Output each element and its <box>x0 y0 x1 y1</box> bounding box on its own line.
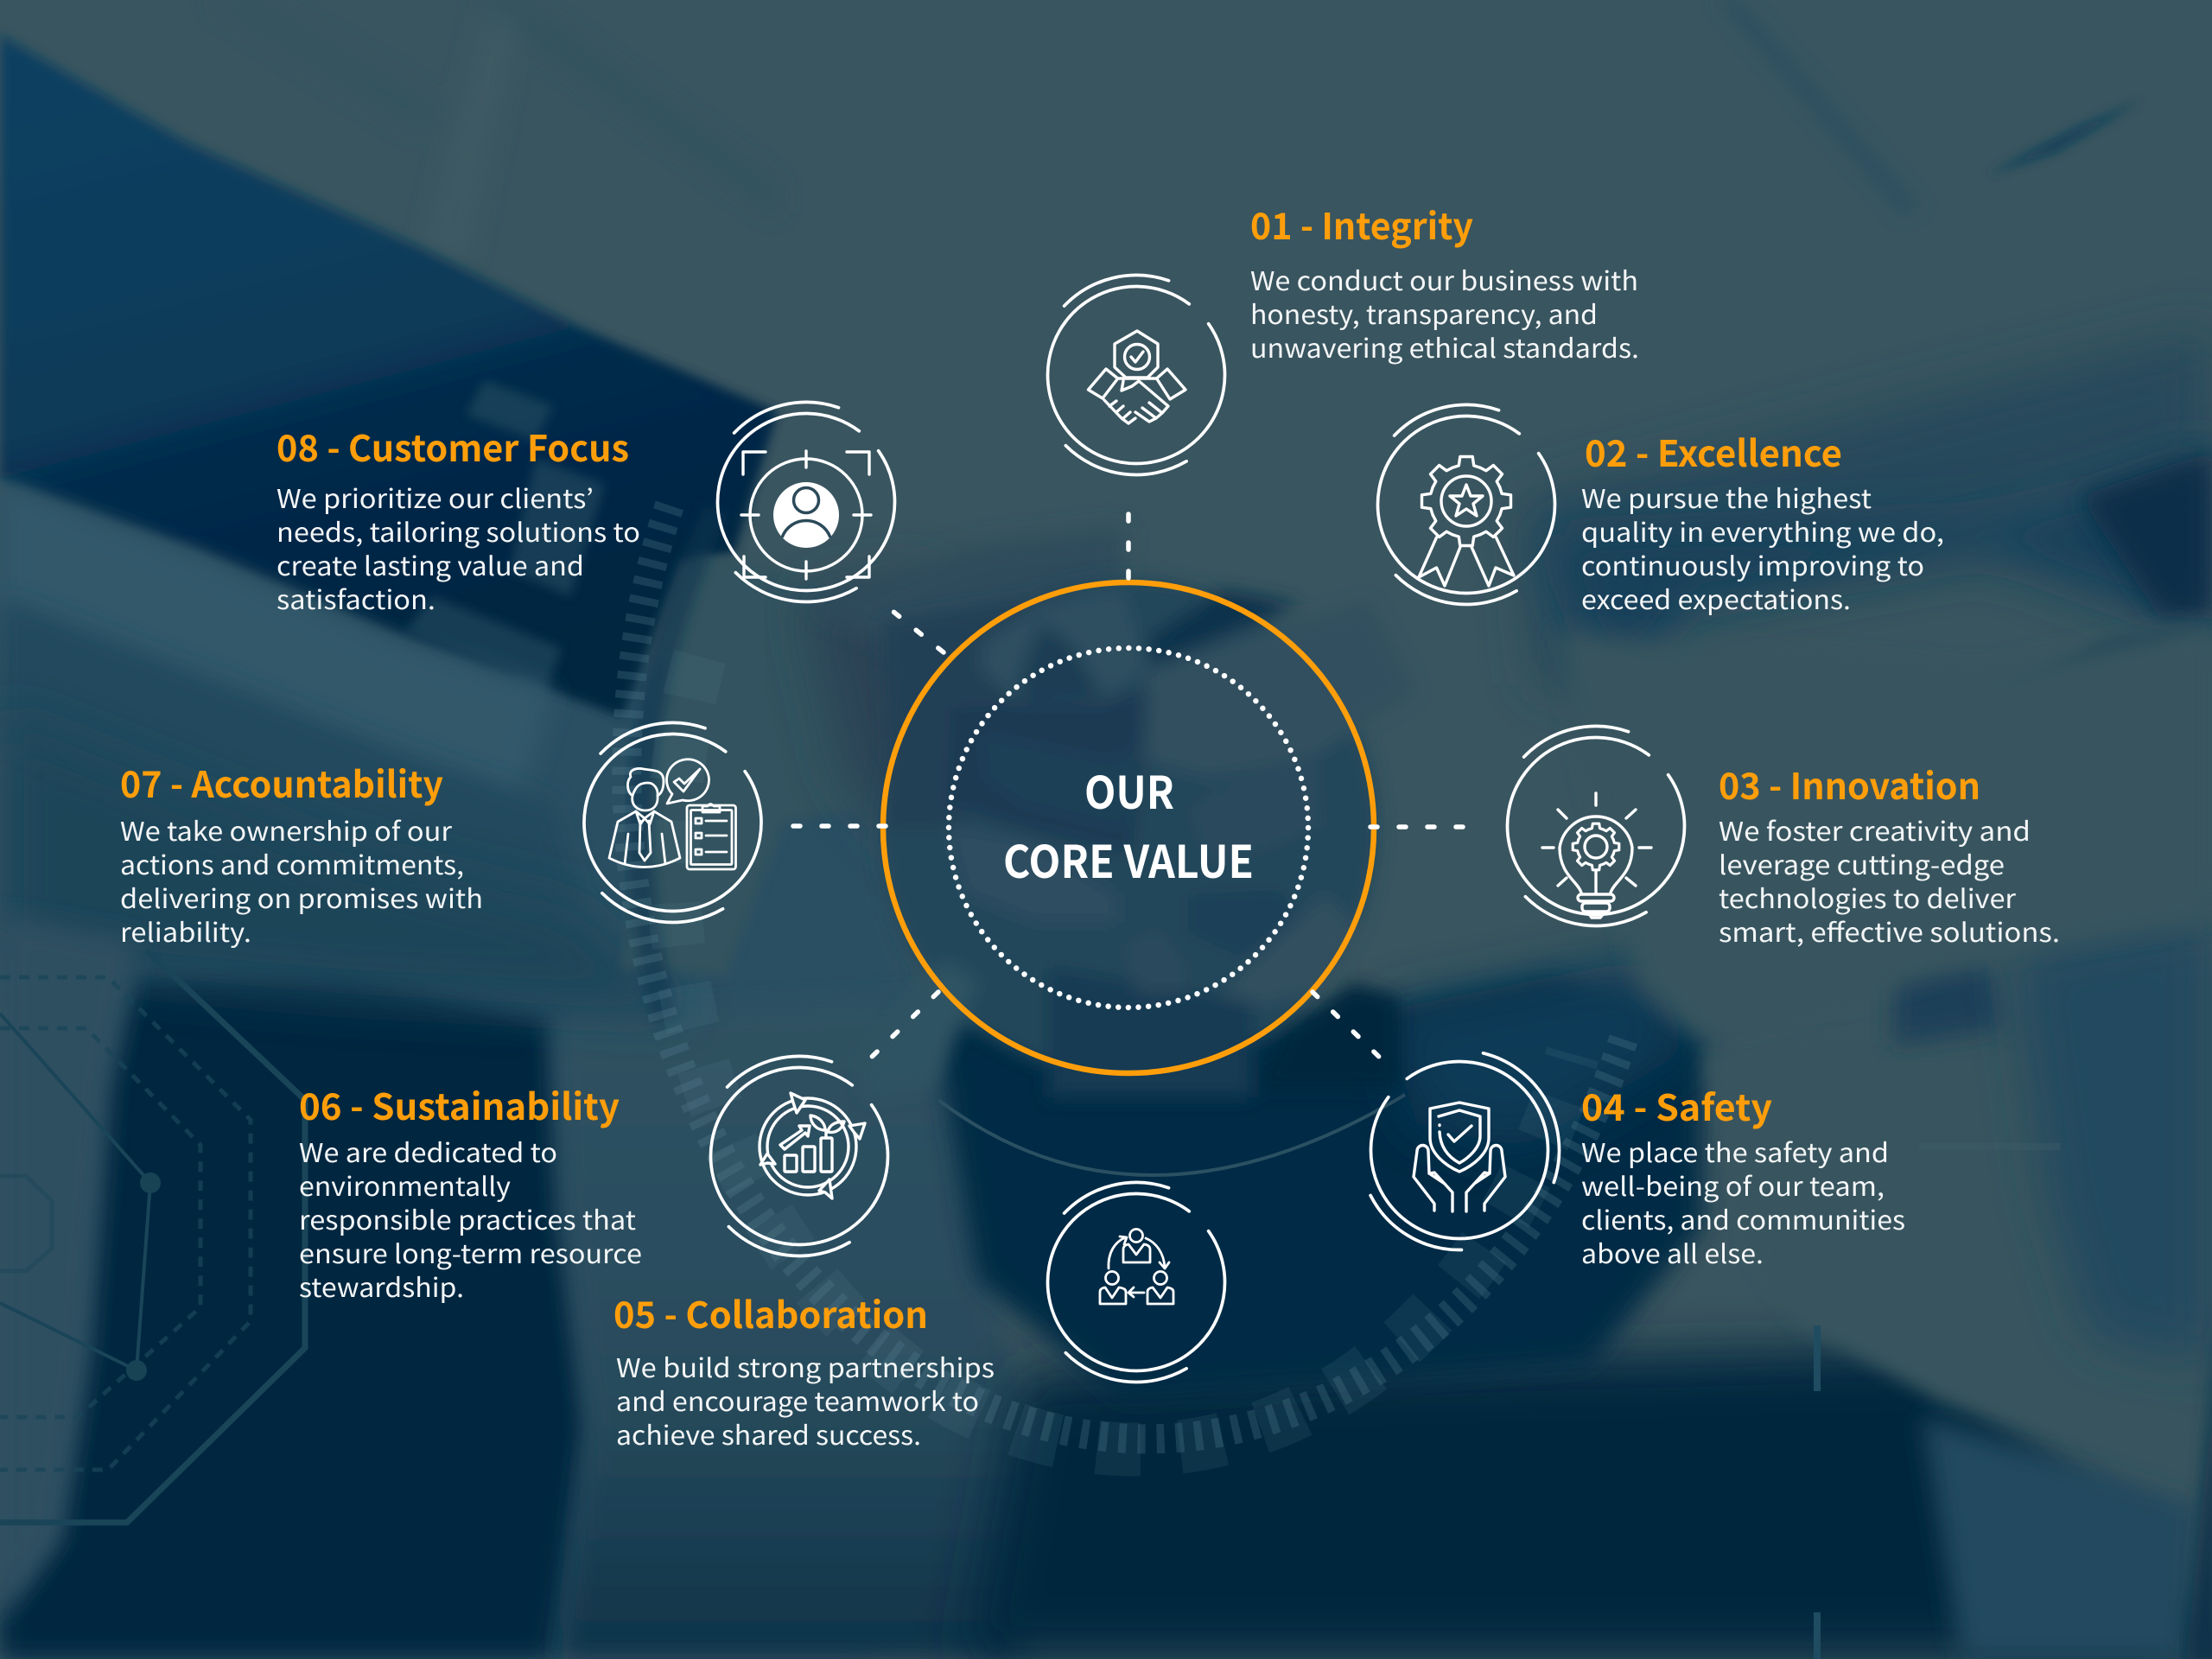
text: description: technologies to deliver <box>1719 878 2016 916</box>
upper hand behind center <box>812 527 1123 683</box>
panel: 02 Excellence <box>1325 364 1944 645</box>
heading: 01 Integrity: 01 - Integrity <box>1250 198 1473 251</box>
left sleeve <box>0 35 778 717</box>
sleeve plaid <box>406 380 605 717</box>
text: description: leverage cutting-edge <box>1719 844 2005 882</box>
text: description: We pursue the highest <box>1581 478 1872 516</box>
text: description: responsible practices that <box>299 1199 636 1237</box>
text: description: above all else. <box>1581 1233 1764 1271</box>
text: description: We place the safety and <box>1581 1132 1889 1170</box>
text: description: well-being of our team, <box>1581 1166 1885 1204</box>
text: description: clients, and communities <box>1581 1199 1905 1237</box>
text: description: We conduct our business with <box>1250 260 1638 298</box>
text: description: exceed expectations. <box>1581 579 1851 617</box>
right sleeve dark band <box>1521 328 2212 695</box>
text: description: smart, effective solutions. <box>1719 912 2060 950</box>
text: description <box>1581 1132 1905 1271</box>
icon: customer target <box>665 361 947 643</box>
bottom-center hand and gear band <box>933 976 1702 1400</box>
text: description: We foster creativity and <box>1719 810 2031 849</box>
icon: handshake with shield <box>995 234 1277 516</box>
panel: 06 Sustainability <box>299 1015 940 1305</box>
icon: shield in hands <box>1336 1027 1583 1274</box>
center shirt / collar <box>622 555 899 976</box>
icon: growth cycle <box>658 1015 940 1297</box>
text: description: delivering on promises with <box>120 878 483 916</box>
text: description: stewardship. <box>299 1267 464 1305</box>
text: description: actions and commitments, <box>120 844 464 882</box>
heading: 05 Collaboration: 05 - Collaboration <box>613 1287 928 1339</box>
dotted inner ring <box>949 648 1308 1007</box>
dark suit on lower left <box>0 976 588 1659</box>
dashed connectors <box>791 514 1467 1058</box>
text: description <box>299 1132 642 1305</box>
panel: 03 Innovation <box>1455 685 2060 967</box>
heading: 08 Customer Focus: 08 - Customer Focus <box>276 420 629 473</box>
cuff light lower shirt <box>0 484 553 804</box>
panel: 08 Customer Focus <box>276 361 947 643</box>
title: our core value: CORE VALUE <box>1003 826 1254 891</box>
text: description: We build strong partnerships <box>616 1347 995 1385</box>
text: description: needs, tailoring solutions to <box>276 512 640 550</box>
text: description: We take ownership of our <box>120 810 452 849</box>
fists inside central circle <box>864 577 1417 1097</box>
text: description <box>616 1347 995 1452</box>
panel: 07 Accountability <box>120 682 814 963</box>
bottom dark <box>968 1348 2212 1659</box>
dark band of the gear on the left <box>640 510 717 1020</box>
text: description: create lasting value and <box>276 545 584 583</box>
icon: light bulb with gear <box>1455 685 1737 967</box>
panel: 01 Integrity <box>995 198 1639 516</box>
text: description: satisfaction. <box>276 579 435 617</box>
text: description: We prioritize our clients’ <box>276 478 594 516</box>
faint top diagonals <box>207 0 778 259</box>
heading: 03 Innovation: 03 - Innovation <box>1719 758 1980 810</box>
lower teal strip <box>553 994 1037 1659</box>
text: description <box>1581 478 1944 617</box>
right cuff light <box>1706 1025 2203 1492</box>
text: description: ensure long-term resource <box>299 1233 642 1271</box>
heading: 04 Safety: 04 - Safety <box>1581 1079 1772 1132</box>
light teal left edge <box>0 916 138 1616</box>
orange outer ring <box>883 582 1374 1073</box>
icon: person with checklist <box>531 682 814 963</box>
heading: 02 Excellence: 02 - Excellence <box>1585 425 1842 478</box>
icon: team cycle <box>995 1141 1277 1423</box>
text: description <box>120 810 483 950</box>
text: description: We are dedicated to <box>299 1132 557 1170</box>
panel: 05 Collaboration <box>613 1141 1277 1452</box>
text: description <box>276 478 640 617</box>
text: description: achieve shared success. <box>616 1414 921 1452</box>
heading: 07 Accountability: 07 - Accountability <box>120 756 443 809</box>
text: description: honesty, transparency, and <box>1250 294 1598 332</box>
text: description: continuously improving to <box>1581 545 1924 583</box>
title: our core value: OUR <box>1084 757 1174 822</box>
text: description: reliability. <box>120 912 251 950</box>
text: description: quality in everything we do, <box>1581 512 1944 550</box>
title: our core value <box>1003 757 1254 891</box>
text: description: environmentally <box>299 1166 511 1204</box>
text: description <box>1250 260 1639 365</box>
panel: 04 Safety <box>1336 1027 1905 1274</box>
heading: 06 Sustainability: 06 - Sustainability <box>299 1078 620 1131</box>
text: description: and encourage teamwork to <box>616 1381 979 1419</box>
text: description <box>1719 810 2060 950</box>
lower-left shirt tone <box>0 467 950 1659</box>
gear band ticks <box>626 505 1624 1439</box>
icon: award gear ribbon <box>1325 364 1607 645</box>
central circle <box>883 582 1374 1073</box>
hexagon circuit lines lower left <box>0 950 305 1522</box>
text: description: unwavering ethical standards. <box>1250 327 1639 365</box>
